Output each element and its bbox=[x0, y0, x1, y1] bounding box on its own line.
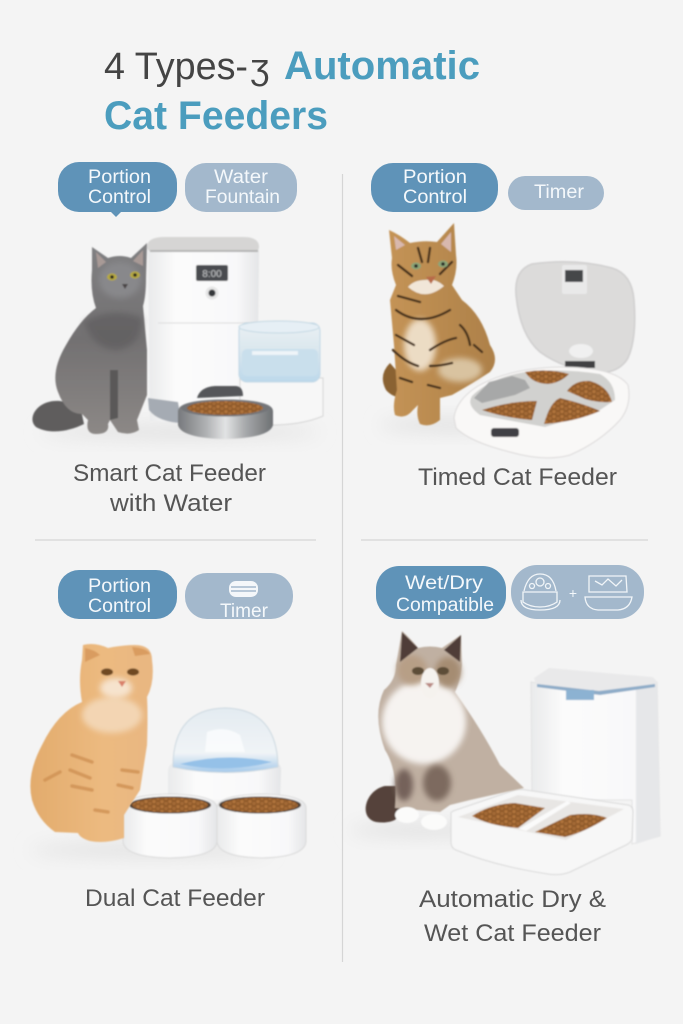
divider lines bbox=[35, 174, 648, 962]
timed feeder unit bbox=[454, 262, 635, 458]
tray base bbox=[454, 367, 629, 458]
label: Dual Cat Feeder bbox=[85, 885, 265, 912]
title: Automatic bbox=[284, 44, 480, 88]
tag: water fountain: Fountain bbox=[205, 187, 280, 208]
label bbox=[73, 460, 266, 517]
tag: water fountain: Water bbox=[214, 167, 269, 188]
panel: timed cat feeder bbox=[371, 163, 635, 491]
icon: timer bbox=[229, 581, 258, 597]
tag: wet/dry compatible bbox=[376, 566, 506, 619]
tag: portion control bbox=[58, 162, 177, 217]
title: 4 Types- bbox=[104, 46, 248, 88]
divided tray bbox=[451, 790, 633, 875]
tag: portion control: Control bbox=[88, 187, 151, 208]
label: Automatic Dry & bbox=[419, 886, 606, 913]
fountain dome bbox=[168, 708, 281, 800]
digital display: 8:00 bbox=[202, 269, 222, 280]
steel food bowl bbox=[178, 386, 273, 439]
orange cat bbox=[30, 644, 153, 842]
floor shadow bbox=[40, 426, 320, 438]
dial button bbox=[206, 286, 218, 300]
panel: smart cat feeder with water bbox=[32, 162, 323, 517]
water fountain unit bbox=[239, 321, 323, 425]
tag: wet/dry compatible: Compatible bbox=[396, 595, 494, 616]
tag: portion control bbox=[58, 570, 177, 619]
ragdoll cat bbox=[366, 631, 524, 830]
tag: portion control bbox=[371, 163, 498, 212]
hopper feeder unit bbox=[531, 668, 660, 844]
tag: portion control: Control bbox=[88, 596, 151, 617]
tag: timer with icon: Timer bbox=[220, 601, 269, 622]
tag: portion control: Portion bbox=[88, 576, 151, 597]
tag: portion control: Control bbox=[403, 187, 467, 208]
label: Timed Cat Feeder bbox=[418, 464, 617, 491]
panel: automatic dry and wet cat feeder bbox=[350, 565, 660, 947]
smart feeder unit bbox=[147, 237, 259, 423]
icon: dry food bowl bbox=[521, 574, 560, 610]
label bbox=[419, 886, 606, 947]
label: Smart Cat Feeder bbox=[73, 460, 266, 487]
tag: water fountain bbox=[185, 163, 297, 212]
label: with Water bbox=[109, 490, 232, 517]
grey cat bbox=[32, 243, 147, 434]
tag: wet/dry compatible: Wet/Dry bbox=[405, 573, 484, 594]
double food bowls bbox=[123, 794, 306, 858]
tag: wet and dry bowl icons: + bbox=[569, 585, 577, 601]
open lid bbox=[516, 262, 635, 373]
label: Wet Cat Feeder bbox=[424, 920, 601, 947]
tabby cat bbox=[383, 223, 495, 425]
floor shadow bbox=[350, 824, 490, 836]
tag: portion control: Portion bbox=[403, 167, 467, 188]
tag: portion control: Portion bbox=[88, 167, 151, 188]
floor shadow bbox=[380, 419, 520, 431]
tag: timer with icon bbox=[185, 573, 293, 622]
title: Cat Feeders bbox=[104, 94, 328, 138]
icon: wet food bowl bbox=[585, 576, 632, 610]
tag: timer bbox=[508, 176, 604, 210]
floor shadow bbox=[30, 844, 270, 856]
panel: dual cat feeder bbox=[30, 570, 306, 912]
title bbox=[104, 44, 480, 138]
title: ʒ bbox=[250, 46, 270, 87]
tag: timer: Timer bbox=[534, 182, 585, 203]
digital display bbox=[196, 265, 228, 281]
tag: wet and dry bowl icons bbox=[511, 565, 644, 619]
